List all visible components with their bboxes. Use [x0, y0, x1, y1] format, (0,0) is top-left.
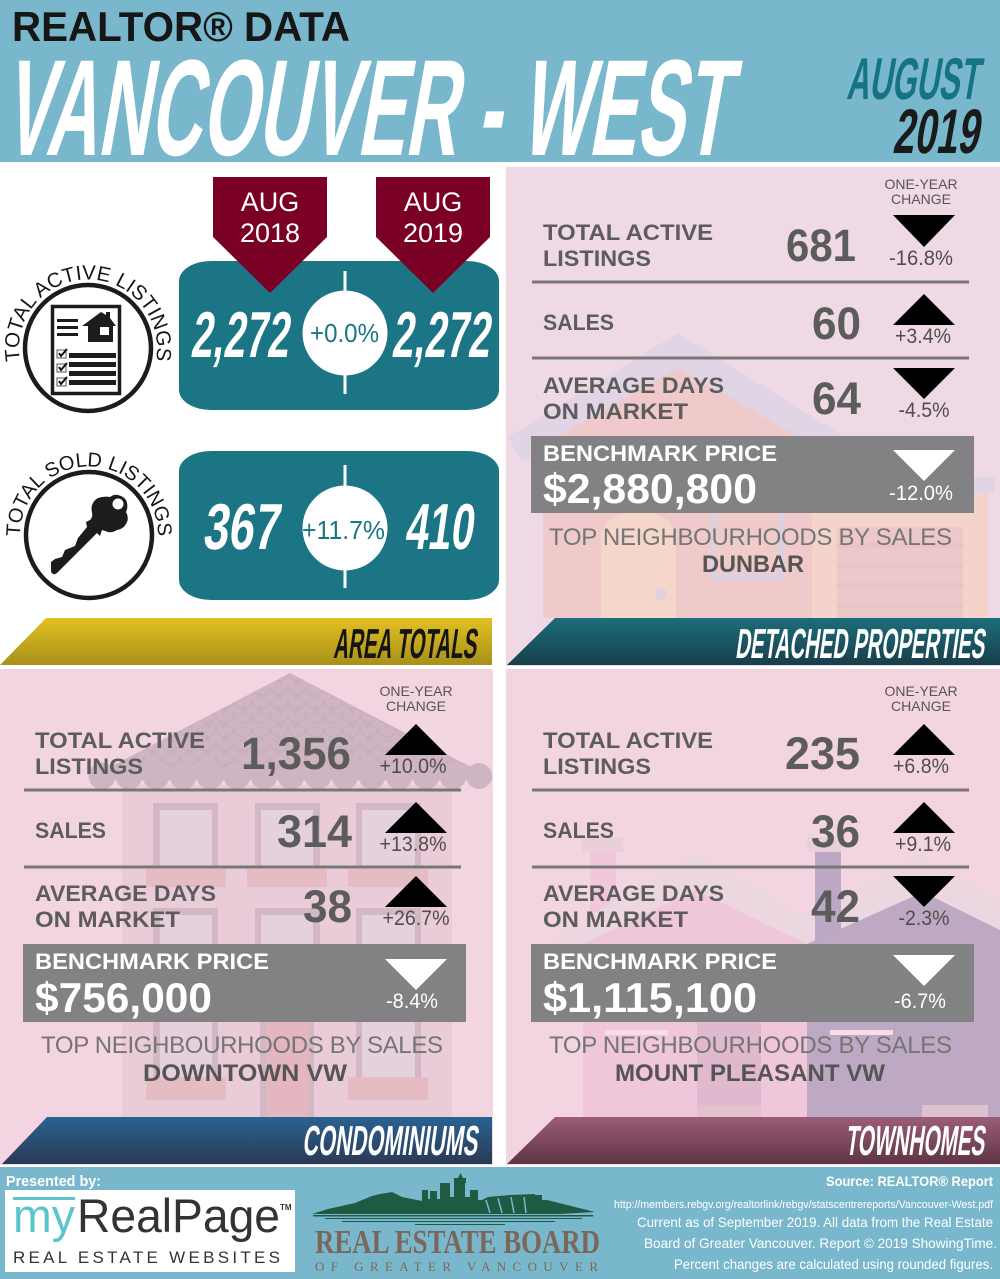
logo: real estate board of greater vancouver: REAL ESTATE BOARD [315, 1224, 600, 1261]
metric: total active listings [24, 683, 461, 792]
metric: total active listings: 235 [785, 728, 860, 779]
benchmark price box: BENCHMARK PRICE [543, 441, 777, 466]
banner: area totals [0, 618, 492, 667]
panel: detached properties [506, 167, 1000, 667]
metric: sales: +13.8% [380, 833, 446, 856]
logo: myRealPage [5, 1189, 295, 1272]
metric: total active listings: CHANGE [891, 191, 951, 207]
ribbon: aug 2018: 2018 [240, 218, 300, 248]
logo: myRealPage: RealPage [77, 1189, 280, 1242]
stat box: active listings: +0.0% [310, 318, 379, 348]
metric: average days on market: ON MARKET [543, 399, 689, 424]
metric: average days on market: -4.5% [898, 399, 950, 422]
top neighbourhoods: TOP NEIGHBOURHOODS BY SALES [549, 1032, 952, 1059]
metric: average days on market: ON MARKET [543, 907, 689, 932]
panel: condominiums [0, 669, 493, 1165]
metric: average days on market: 42 [811, 881, 860, 932]
benchmark price box [23, 944, 466, 1022]
metric: average days on market [543, 876, 955, 932]
footer [0, 1167, 1000, 1279]
metric: average days on market: ON MARKET [35, 907, 181, 932]
panel: townhomes [506, 669, 1000, 1165]
ribbon: aug 2019 [376, 177, 490, 293]
metric: total active listings: CHANGE [891, 698, 951, 714]
metric: total active listings: ONE-YEAR [379, 683, 453, 699]
stat box: sold listings: 410 [402, 490, 480, 563]
banner: condominiums: CONDOMINIUMS [301, 1117, 482, 1164]
benchmark price box: BENCHMARK PRICE [35, 949, 269, 974]
metric: total active listings: TOTAL ACTIVE [543, 220, 713, 245]
source notes: Current as of September 2019. All data from the Real Estate [637, 1214, 993, 1230]
icon: active listings document [4, 265, 172, 414]
metric: average days on market: AVERAGE DAYS [543, 373, 724, 398]
ribbon: aug 2018: AUG [241, 187, 299, 217]
presented by label: Presented by: [6, 1173, 101, 1190]
benchmark price box: $756,000 [35, 974, 212, 1021]
metric: sales [532, 802, 969, 868]
icon: sold listings key: TOTAL SOLD LISTINGS [6, 452, 172, 536]
top neighbourhoods: MOUNT PLEASANT VW [615, 1060, 885, 1087]
top neighbourhoods: DUNBAR [702, 551, 804, 578]
metric: total active listings: CHANGE [386, 698, 446, 714]
house illustration: townhomes [553, 837, 1000, 1117]
stat box: sold listings [179, 451, 499, 600]
logo: myRealPage: my [13, 1189, 75, 1242]
metric: total active listings: TOTAL ACTIVE [35, 728, 205, 753]
icon: active listings document: TOTAL ACTIVE LISTINGS [4, 265, 172, 362]
metric: total active listings: LISTINGS [543, 246, 651, 271]
ribbon: aug 2019: 2019 [403, 218, 463, 248]
benchmark price box: -12.0% [889, 482, 953, 505]
benchmark price box [531, 944, 974, 1022]
header band [0, 0, 1000, 185]
metric: total active listings: -16.8% [889, 247, 953, 270]
stat box: sold listings: 367 [200, 490, 286, 563]
metric: average days on market: 64 [812, 373, 861, 424]
metric: total active listings [532, 683, 969, 792]
source notes: Board of Greater Vancouver. Report © 2019 ShowingTime. [644, 1235, 997, 1251]
metric: total active listings: ONE-YEAR [884, 683, 958, 699]
metric: sales: 314 [277, 806, 352, 857]
metric: total active listings: TOTAL ACTIVE [543, 728, 713, 753]
metric: average days on market: 38 [303, 881, 352, 932]
metric: average days on market: +26.7% [382, 907, 450, 930]
metric: sales [532, 294, 969, 360]
benchmark price box: $1,115,100 [543, 974, 757, 1021]
metric: total active listings: +10.0% [380, 755, 446, 778]
benchmark price box: -6.7% [894, 990, 946, 1013]
metric: sales: 60 [812, 298, 861, 349]
metric: average days on market [35, 876, 450, 932]
icon: sold listings key [6, 452, 172, 600]
panel: area totals [0, 177, 499, 667]
logo: myRealPage: TM [280, 1203, 292, 1212]
top neighbourhoods: TOP NEIGHBOURHOODS BY SALES [549, 524, 952, 551]
source notes: http://members.rebgv.org/realtorlink/rebgv/statscentrereports/Vancouver-West.pdf [614, 1199, 994, 1211]
house illustration: condo [88, 673, 492, 1117]
metric: sales: SALES [35, 818, 106, 843]
ribbon: aug 2019: AUG [404, 187, 462, 217]
banner: condominiums [2, 1117, 492, 1164]
stat box: active listings [179, 261, 499, 410]
metric: total active listings: 681 [786, 220, 856, 271]
metric: sales [24, 802, 461, 868]
ribbon: aug 2018 [213, 177, 327, 293]
metric: average days on market: AVERAGE DAYS [35, 881, 216, 906]
heading: realtor data: REALTOR® DATA [12, 3, 350, 50]
metric: average days on market: -2.3% [898, 907, 950, 930]
metric: total active listings: +6.8% [893, 755, 949, 778]
stat box: active listings: 2,272 [389, 298, 497, 371]
logo: myRealPage: REAL ESTATE WEBSITES [13, 1248, 280, 1267]
metric: sales: SALES [543, 310, 614, 335]
metric: average days on market: AVERAGE DAYS [543, 881, 724, 906]
metric: total active listings: ONE-YEAR [884, 176, 958, 192]
metric: total active listings: LISTINGS [35, 754, 143, 779]
stat box: sold listings: +11.7% [302, 515, 385, 545]
logo: real estate board of greater vancouver: OF GREATER VANCOUVER [315, 1259, 598, 1274]
benchmark price box: -8.4% [386, 990, 438, 1013]
metric: total active listings: LISTINGS [543, 754, 651, 779]
metric: total active listings [532, 176, 969, 284]
source notes [614, 1173, 997, 1272]
top neighbourhoods: DOWNTOWN VW [143, 1060, 347, 1087]
banner: area totals: AREA TOTALS [332, 620, 481, 667]
metric: sales: 36 [811, 806, 860, 857]
house illustration: detached [508, 333, 995, 618]
metric: sales: SALES [543, 818, 614, 843]
metric: average days on market [543, 368, 955, 424]
benchmark price box [531, 436, 974, 513]
logo: real estate board of greater vancouver [312, 1173, 600, 1274]
top neighbourhoods [549, 1032, 952, 1087]
banner: detached properties [507, 618, 1000, 667]
top neighbourhoods [549, 524, 952, 578]
banner: townhomes [507, 1117, 1000, 1164]
top neighbourhoods: TOP NEIGHBOURHOODS BY SALES [41, 1032, 443, 1059]
metric: sales: +9.1% [895, 833, 951, 856]
benchmark price box: $2,880,800 [543, 465, 757, 512]
top neighbourhoods [41, 1032, 443, 1087]
metric: sales: +3.4% [895, 325, 951, 348]
metric: total active listings: 1,356 [241, 728, 351, 779]
stat box: active listings: 2,272 [188, 298, 296, 371]
benchmark price box: BENCHMARK PRICE [543, 949, 777, 974]
